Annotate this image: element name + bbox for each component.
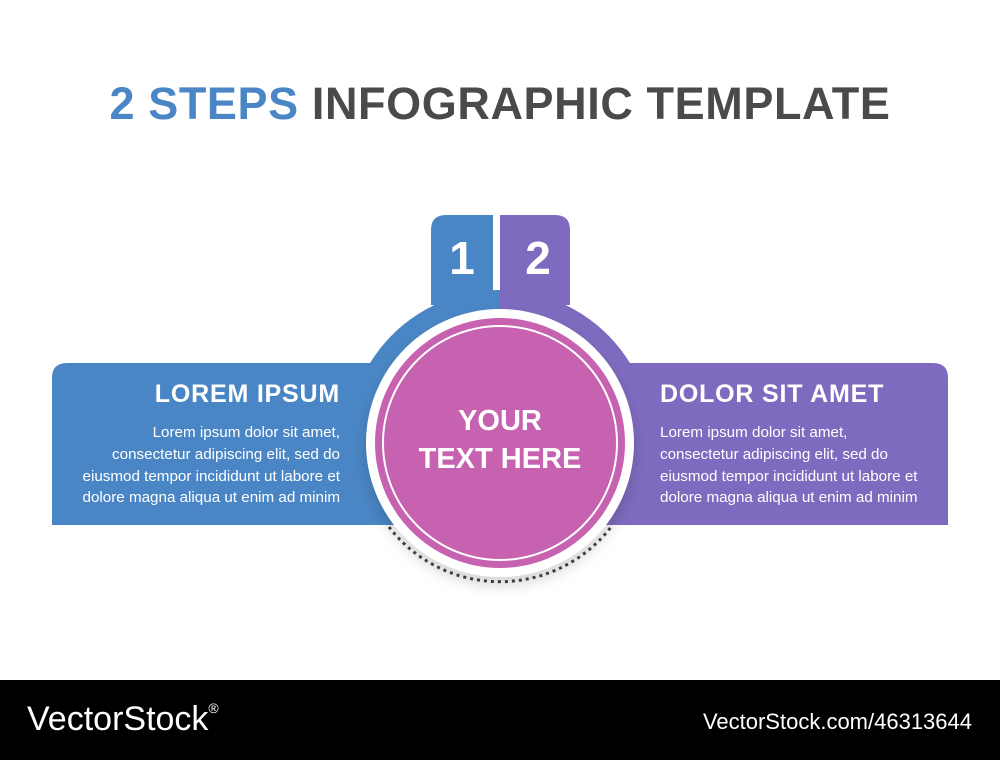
panel: left blue	[52, 363, 420, 525]
tab 1	[431, 215, 493, 305]
tab 2: 2	[525, 232, 551, 284]
panel: right purple: DOLOR SIT AMET	[660, 380, 884, 408]
panel: right purple: consectetur adipiscing elit, sed do	[660, 446, 888, 463]
center circle: YOUR	[458, 405, 542, 437]
panel: left blue: consectetur adipiscing elit, sed do	[112, 446, 340, 463]
dotted arc	[389, 527, 611, 582]
panel: left blue: Lorem ipsum dolor sit amet,	[153, 424, 340, 441]
footer url: VectorStock.com/46313644	[703, 709, 972, 734]
panel: right purple: eiusmod tempor incididunt ut labore et	[660, 468, 918, 485]
panel: left blue: LOREM IPSUM	[155, 380, 340, 408]
center circle: TEXT HERE	[419, 443, 581, 475]
tab 2	[500, 215, 570, 305]
center circle	[366, 309, 634, 577]
panel: right purple: Lorem ipsum dolor sit amet,	[660, 424, 847, 441]
title: 2 STEPS INFOGRAPHIC TEMPLATE	[109, 78, 891, 129]
tab 1: 1	[449, 232, 475, 284]
panel: left blue: eiusmod tempor incididunt ut labore et	[82, 468, 341, 485]
panel: right purple	[580, 363, 948, 525]
ring halves	[347, 290, 500, 480]
panel: right purple: dolore magna aliqua ut enim ad minim	[660, 489, 917, 506]
footer bar	[0, 680, 1000, 760]
footer brand: VectorStock®	[27, 700, 219, 738]
panel: left blue: dolore magna aliqua ut enim ad minim	[83, 489, 340, 506]
